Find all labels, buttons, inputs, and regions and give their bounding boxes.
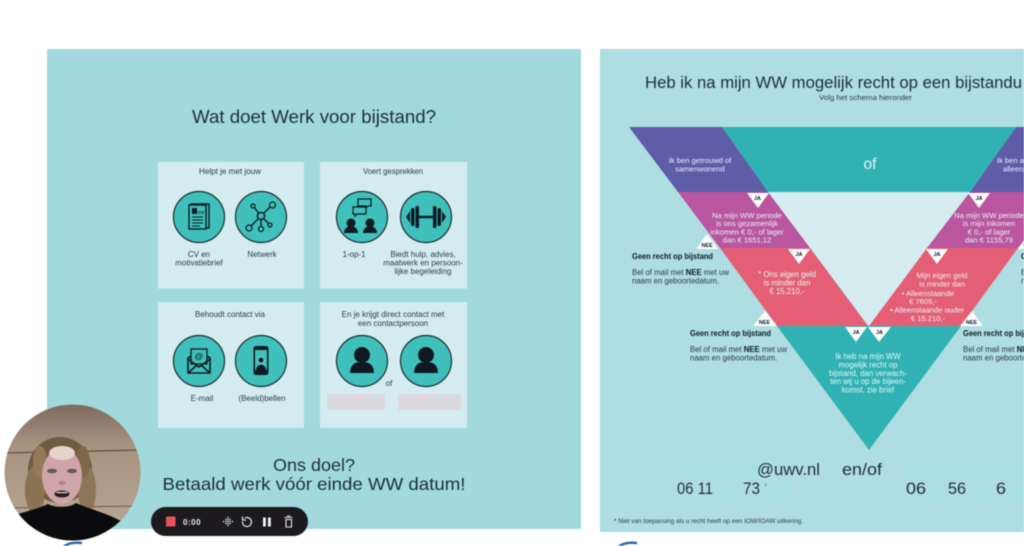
geen recht note 2: Bel of mail met NEE met uw [690,345,787,354]
label: of: of [386,379,393,388]
label: beeldbellen: (Beeld)bellen [238,394,286,403]
card: direct contact met contactpersoon [320,302,467,428]
email and phone text [677,460,1006,498]
icon: restart [242,516,251,527]
red block left: eigen geld: is minder dan [764,278,810,288]
icon: CV [174,192,224,242]
heading: recht op bijstand: Heb ik na mijn WW mogelijk recht op een bijstandu [645,73,1022,92]
label: CV en motivatiebrief: motivatiebrief [175,258,224,268]
purple block right: alleenstaand [970,127,1024,192]
red block right: eigen geld: • Alleenstaande ouder [890,306,964,314]
icon: beeldbellen [236,336,286,386]
center band: of: of [864,156,877,173]
mouth [54,490,70,498]
teal block: recht op bijstand [777,326,961,450]
redacted name 1 [327,394,385,410]
magenta block right: inkomen: Na mijn WW periode [954,211,1024,220]
icon: e-mail [174,336,224,386]
icon: e-mail: @ [195,351,203,361]
magenta block right: inkomen: is mijn inkomen [963,219,1015,228]
red block right: eigen geld: Mijn eigen geld [916,271,968,280]
label: CV en motivatiebrief: CV en [188,250,210,259]
heading: Wat doet Werk voor bijstand: Wat doet Werk voor bijstand? [192,106,436,127]
purple block left: getrouwd: Ik ben getrouwd of [669,156,732,165]
NEE markers: NEE [701,243,713,249]
card heading: behoudt contact via: Behoudt contact via [195,310,266,319]
timer: 0:00 [183,518,201,527]
card: behoudt contact via [158,302,304,428]
icon: CV: CV [198,210,204,215]
geen recht note 2: naam en geboortedatum. [690,354,777,362]
eyes [47,469,57,473]
NEE markers: NEE [966,320,977,326]
teal block: recht op bijstand: komst, zie brief [842,386,895,394]
geen recht note 1: Bel of mail met NEE met uw [632,268,729,277]
sweater [18,503,121,545]
doel text [162,455,466,494]
JA markers [747,193,990,342]
red block right: eigen geld: € 7605,- [909,297,937,306]
nose [58,481,66,485]
teal block: recht op bijstand: Ik heb na mijn WW [835,352,901,361]
red block right: eigen geld: • Alleenstaande [902,289,954,298]
center band: of [722,127,1016,192]
redacted name 2 [398,394,461,410]
teal block: recht op bijstand: ten wij u op de bijeen- [830,377,906,386]
magenta block right: inkomen: dan € 1155,79 [965,236,1013,244]
icon: pause [263,518,271,526]
face [42,448,82,504]
geen recht note 1 [632,252,729,286]
card heading: direct contact: En je krijgt direct contact met [342,310,445,319]
geen recht note 1: naam en geboortedatum. [632,276,719,286]
email and phone text: en/of [842,460,882,479]
subheading: volg het schema: Volg het schema hieronder [819,95,913,102]
label: biedt hulp: Biedt hulp, advies, [390,250,456,259]
icon: 1-op-1 gesprek [336,192,388,242]
icon: record square [166,516,176,526]
magenta block right: inkomen: € 0,- of lager [968,228,1011,236]
recording toolbar [151,507,308,536]
JA markers: JA [852,330,860,336]
icon: delete [284,516,292,527]
NEE markers: NEE [759,320,770,326]
geen recht note 3 [963,329,1024,362]
email and phone text: @uwv.nl [757,460,820,479]
red block left: eigen geld [720,248,868,326]
doel text: Ons doel? [273,455,355,475]
icon: contactpersoon 1 [336,336,388,386]
email and phone text: 6 [996,479,1006,498]
JA markers: JA [933,252,941,258]
JA markers: JA [754,196,761,202]
teal block: recht op bijstand: bijstand, dan verwach- [829,369,907,378]
card: voert gesprekken [320,162,467,288]
logo fragments [62,543,637,546]
icon: netwerk [236,192,286,242]
hair [28,437,92,503]
NEE markers [696,234,1024,326]
JA markers: JA [795,252,803,258]
email and phone text: 56 [948,479,966,498]
JA markers: JA [975,196,983,202]
magenta block left: inkomen: Na mijn WW periode [712,211,782,220]
icon: contactpersoon 2 [400,336,452,386]
email and phone text: 06 [906,479,926,498]
email and phone text: 73 [743,479,760,498]
magenta block left: inkomen [678,192,810,248]
panel: schema bijstand [600,49,1024,532]
card: helpt je met jouw [158,162,304,288]
label: biedt hulp: maatwerk en persoon- [383,258,463,268]
icon: halter [400,192,452,242]
magenta block left: inkomen: is ons gezamenlijk [716,219,778,228]
webcam portrait [4,404,141,545]
label: biedt hulp: lijke begeleiding [395,267,451,276]
card heading: voert gesprekken: Voert gesprekken [363,167,423,176]
magenta block left: inkomen: inkomen € 0,- of lager [710,228,784,236]
gap area [768,192,970,326]
label: netwerk: Netwerk [247,250,278,259]
red block right: eigen geld [869,248,1018,326]
panel: Wat doet Werk voor bijstand [47,49,581,529]
card heading: direct contact: een contactpersoon [358,319,428,328]
icon: grid [223,517,233,526]
geen recht note 4 [1021,252,1024,286]
teal block: recht op bijstand: mogelijk recht op [839,360,898,370]
geen recht note 2: Geen recht op bijstand [690,329,771,338]
red block right: eigen geld: € 15.210,- [911,314,946,323]
label: 1-op-1: 1-op-1 [342,250,366,259]
email and phone text: ' [765,483,767,492]
purple block left: getrouwd: samenwonend [675,164,725,174]
JA markers: JA [876,330,883,336]
magenta block right: inkomen [927,192,1024,248]
purple block left: getrouwd [629,127,768,192]
flow diagram [629,127,1024,450]
geen recht note 2 [690,329,787,362]
doel text: Betaald werk vóór einde WW datum! [162,474,466,494]
card heading: helpt je met jouw: Helpt je met jouw [199,167,261,176]
label: e-mail: E-mail [191,394,214,403]
red block left: eigen geld: * Ons eigen geld [758,270,816,279]
magenta block left: inkomen: dan € 1651,12 [723,236,771,244]
footnote: * Niet van toepassing als u recht heeft op een IOW/IOAW uitkering. [614,518,803,525]
red block right: eigen geld: is minder dan [919,280,965,288]
email and phone text: 06 11 [677,479,713,498]
redactions [674,462,1024,500]
contact details [674,460,1024,500]
red block left: eigen geld: € 15.210,- [769,287,805,296]
geen recht note 1: Geen recht op bijstand [632,252,713,261]
